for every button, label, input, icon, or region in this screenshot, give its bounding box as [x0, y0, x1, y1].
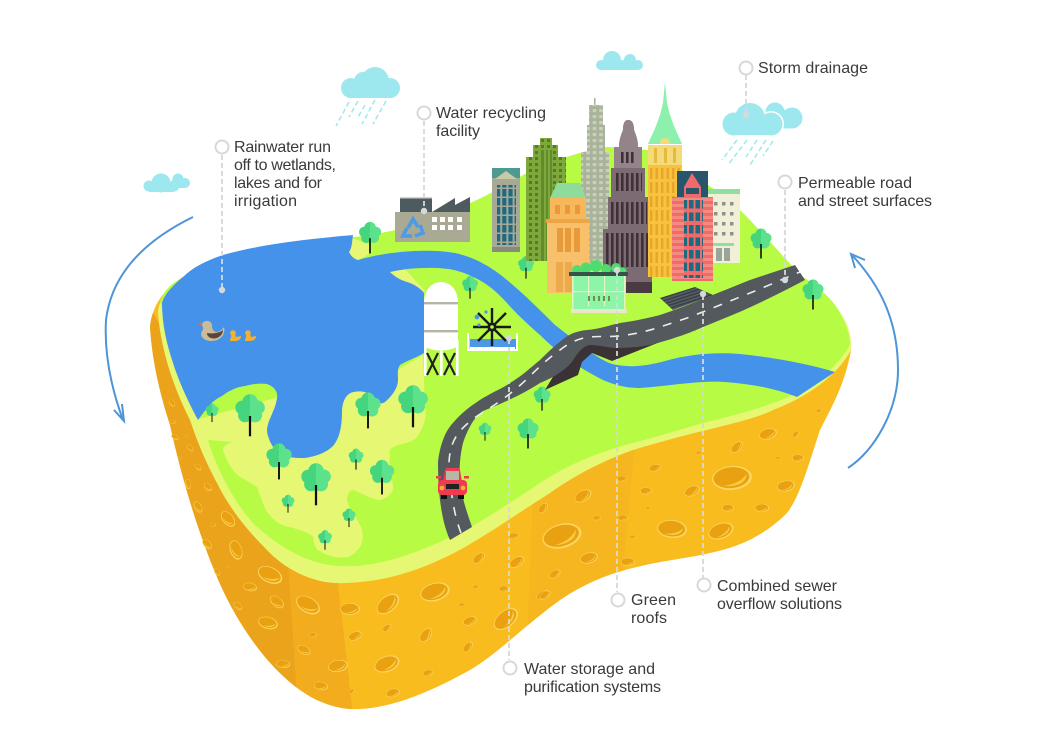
callout: rainwater run off — [216, 139, 336, 293]
island: sponge body — [130, 270, 851, 730]
building: green stepped tower — [526, 138, 566, 261]
cloud with rain: right — [722, 102, 802, 165]
callout: green roofs: Green — [631, 592, 676, 609]
callout: rainwater run off: off to wetlands, — [234, 157, 336, 174]
factory: water recycling facility — [395, 197, 470, 242]
callout: green roofs — [612, 267, 676, 627]
arrow: left circulation — [106, 217, 193, 421]
callout: permeable road — [778, 175, 932, 283]
callout: rainwater run off: lakes and for — [234, 175, 323, 192]
building: green roof — [569, 260, 628, 313]
lake and river — [162, 235, 835, 458]
callout: water recycling facility — [418, 105, 546, 214]
callout: water storage and purification: purification systems — [524, 679, 661, 696]
callout: rainwater run off: Rainwater run — [234, 139, 331, 156]
callout: water storage and purification: Water storage and — [524, 661, 655, 678]
callout: water recycling facility: facility — [436, 123, 480, 140]
callout: combined sewer overflow — [698, 291, 842, 613]
building: cream block — [708, 189, 740, 263]
road and bridge — [438, 265, 805, 540]
clouds — [144, 51, 802, 192]
callout: storm drainage — [740, 60, 868, 118]
water storage silo — [424, 282, 459, 376]
cloud: left — [144, 174, 190, 192]
sandy shore around the lake — [195, 238, 426, 558]
callout: storm drainage: Storm drainage — [758, 60, 868, 77]
callout: combined sewer overflow: overflow solutions — [717, 596, 842, 613]
callout: green roofs: roofs — [631, 610, 667, 627]
building: yellow spire tower — [648, 82, 682, 277]
callout: combined sewer overflow: Combined sewer — [717, 578, 838, 595]
icon: recycle — [403, 219, 423, 236]
waterwheel purification tank — [468, 308, 517, 350]
building: red brick tower — [672, 171, 713, 281]
callout: rainwater run off: irrigation — [234, 193, 297, 210]
callout: water storage and purification — [504, 335, 661, 696]
building: purple tiered tower — [603, 120, 652, 293]
cloud with rain: upper left — [336, 67, 400, 126]
arrow: right circulation — [848, 254, 898, 468]
callout: water recycling facility: Water recycling — [436, 105, 546, 122]
island: green ground — [160, 147, 850, 566]
trees — [205, 222, 824, 550]
callout: permeable road: and street surfaces — [798, 193, 932, 210]
ducks — [198, 321, 256, 341]
building: slate tower — [492, 168, 520, 252]
building: grey-green skyscraper — [581, 98, 609, 263]
car — [436, 468, 469, 499]
sponge pores — [168, 398, 822, 699]
island: pale rim of the top surface — [158, 147, 851, 583]
cloud: top centre — [596, 51, 643, 70]
solar panel: sewer overflow grate — [660, 287, 713, 310]
building: orange arched tower — [546, 183, 590, 293]
callout: permeable road: Permeable road — [798, 175, 912, 192]
